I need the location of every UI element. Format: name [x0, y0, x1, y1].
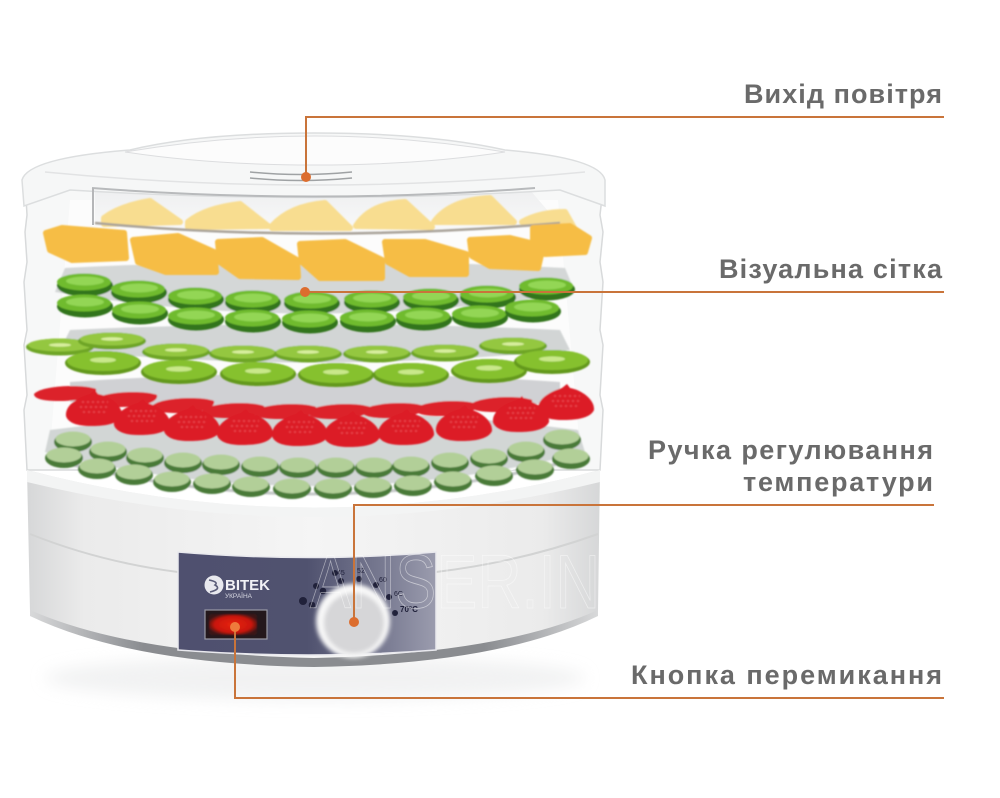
- power switch: [205, 610, 267, 639]
- control panel: [178, 552, 436, 658]
- tray with kiwi slices: [26, 324, 590, 387]
- transparent tray stack walls: [24, 180, 604, 495]
- top tray with pineapple pieces: [46, 198, 589, 278]
- air vent: [250, 172, 352, 180]
- temperature dots: 70°C: [400, 605, 418, 614]
- tray with lime slices: [55, 262, 575, 334]
- temperature dots: 45: [337, 570, 345, 577]
- callout: air outlet: Вихід повітря: [744, 79, 942, 109]
- lid inner window: [95, 190, 560, 235]
- callout: temperature knob: [349, 435, 934, 627]
- lid: [22, 133, 605, 225]
- base housing: [27, 470, 600, 667]
- callout: air outlet: [301, 79, 944, 182]
- temperature dots: 60: [379, 577, 387, 584]
- watermark: ANSER.IN: [310, 540, 600, 625]
- callout: temperature knob: Ручка регулювання: [648, 435, 933, 465]
- brand logo: [204, 576, 270, 600]
- brand logo: BITEK: [225, 577, 270, 594]
- base shadow: [45, 656, 585, 700]
- callout: visual mesh: Візуальна сітка: [719, 254, 943, 284]
- temperature dots: [299, 568, 418, 616]
- callout: power switch: Кнопка перемикання: [631, 660, 942, 690]
- callout: power switch: [230, 622, 944, 698]
- callout: visual mesh: [300, 254, 944, 297]
- temperature dots: 6C: [394, 591, 403, 598]
- callout: temperature knob: температури: [743, 467, 933, 497]
- brand logo: УКРАЇНА: [225, 592, 253, 600]
- bottom tray with cucumber slices: [45, 412, 590, 499]
- temperature dots: 52: [357, 568, 365, 575]
- temperature knob: [316, 584, 390, 658]
- tray with strawberries: [34, 374, 594, 447]
- dehydrator appliance: [22, 133, 605, 667]
